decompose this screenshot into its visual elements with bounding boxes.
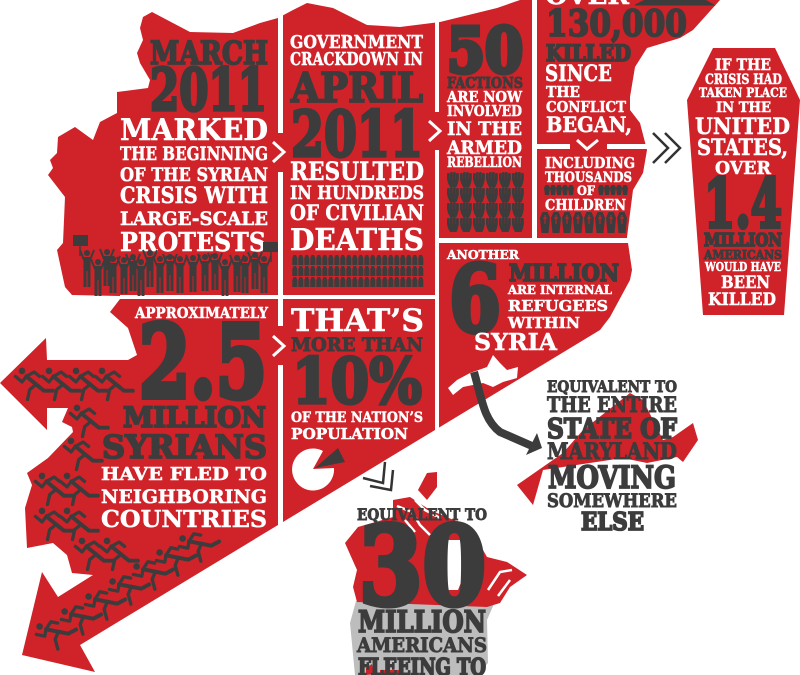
panel: 2.5 million refugees: NEIGHBORING bbox=[101, 486, 267, 508]
panel: March 2011: THE BEGINNING bbox=[120, 143, 268, 165]
map: Maryland with comparison text: EQUIVALENT TO bbox=[547, 377, 677, 396]
panel: including thousands of children: CHILDREN bbox=[545, 196, 626, 214]
map: Maryland with comparison text: MOVING bbox=[548, 460, 676, 496]
panel: April 2011: CRACKDOWN IN bbox=[290, 49, 423, 70]
panel: including thousands of children: INCLUDING bbox=[545, 154, 635, 172]
map: Maryland with comparison text: SOMEWHERE bbox=[547, 490, 677, 512]
map: Maryland with comparison text bbox=[517, 377, 698, 536]
panel dividers bbox=[120, 0, 649, 527]
panel: 2.5 million refugees: MILLION bbox=[123, 401, 266, 434]
panel: March 2011: 2011 bbox=[150, 56, 267, 124]
map: Canada and United States with comparison text bbox=[345, 472, 527, 675]
panel: April 2011 bbox=[290, 32, 424, 258]
panel: over 130,000 killed: THE bbox=[546, 83, 580, 101]
arrow: double chevron to coffin bbox=[653, 133, 680, 163]
white cut-out of Maryland region bbox=[448, 355, 518, 395]
icon: rows of small coffins bbox=[292, 255, 424, 288]
icon: fleeing runners bbox=[15, 368, 223, 655]
panel: including thousands of children bbox=[540, 154, 635, 233]
panel: April 2011: RESULTED bbox=[290, 157, 424, 186]
panel: 6 million internal refugees: ARE INTERNAL bbox=[507, 283, 613, 297]
panel: over 130,000 killed: KILLED bbox=[546, 41, 631, 67]
panel: March 2011: MARCH bbox=[150, 34, 268, 72]
panel: 50 factions: ARE NOW bbox=[446, 88, 523, 106]
panel: coffin United States comparison: KILLED bbox=[708, 290, 776, 310]
panel: 6 million internal refugees: SYRIA bbox=[474, 329, 558, 356]
panel: more than 10%: MORE THAN bbox=[291, 334, 423, 356]
panel: 50 factions: IN THE bbox=[447, 118, 522, 140]
panel: coffin United States comparison: IN THE bbox=[716, 100, 771, 116]
map: Canada and United States with comparison text: 30 bbox=[359, 504, 486, 630]
panel: coffin United States comparison: WOULD HAVE bbox=[704, 260, 781, 274]
panel: March 2011: LARGE-SCALE bbox=[120, 208, 268, 230]
panel: 6 million internal refugees: 6 bbox=[449, 245, 501, 353]
panel: coffin United States comparison: STATES, bbox=[697, 135, 788, 161]
panel: more than 10%: OF THE NATION’S bbox=[291, 410, 423, 426]
panel: 2.5 million refugees: HAVE FLED TO bbox=[101, 464, 267, 485]
panel: April 2011: IN HUNDREDS bbox=[290, 182, 424, 204]
panel: April 2011: 2011 bbox=[291, 97, 423, 171]
panel: March 2011: OF THE SYRIAN bbox=[120, 164, 268, 186]
panel: March 2011: CRISIS WITH bbox=[120, 183, 268, 209]
panel: 6 million internal refugees: WITHIN bbox=[507, 314, 580, 332]
panel: 50 factions: ARMED bbox=[446, 137, 522, 159]
panel: coffin United States comparison: IF THE bbox=[715, 55, 771, 74]
panel: 2.5 million refugees: APPROXIMATELY bbox=[134, 304, 268, 322]
panel: more than 10%: 10% bbox=[292, 344, 422, 418]
chevrons between panels bbox=[273, 121, 598, 356]
arrow: curved arrow to Maryland bbox=[474, 372, 542, 455]
panel: March 2011: MARKED bbox=[120, 113, 268, 148]
panel: 50 factions: INVOLVED bbox=[447, 102, 522, 120]
panel: 2.5 million refugees: SYRIANS bbox=[102, 428, 267, 466]
panel: 6 million internal refugees: REFUGEES bbox=[508, 297, 608, 315]
icon: protest crowd with signs bbox=[73, 235, 278, 296]
map: Maryland with comparison text: THE ENTIRE bbox=[547, 392, 677, 417]
map: Maryland with comparison text: ELSE bbox=[581, 507, 644, 536]
map: Maryland with comparison text: STATE OF bbox=[547, 414, 677, 445]
icon: pie chart 10 percent bbox=[292, 448, 345, 490]
map: Maryland with comparison text: MARYLAND bbox=[547, 439, 677, 465]
panel: 2.5 million refugees: COUNTRIES bbox=[101, 506, 267, 533]
panel: 50 factions: 50 bbox=[447, 14, 523, 87]
panel: 6 million internal refugees bbox=[446, 245, 619, 356]
panel: April 2011: GOVERNMENT bbox=[290, 32, 424, 53]
panel: over 130,000 killed: BEGAN, bbox=[546, 112, 632, 137]
panel: including thousands of children: THOUSANDS bbox=[545, 170, 632, 186]
panel: 50 factions: REBELLION bbox=[447, 155, 522, 171]
panel: 50 factions: FACTIONS bbox=[447, 74, 523, 92]
panel: coffin United States comparison: CRISIS HAD bbox=[705, 72, 782, 88]
panel: March 2011 bbox=[120, 34, 268, 258]
panel: more than 10%: THAT’S bbox=[291, 303, 424, 339]
panel: over 130,000 killed bbox=[545, 0, 714, 137]
panel: coffin United States comparison: OVER bbox=[715, 158, 772, 179]
panel: 2.5 million refugees: 2.5 bbox=[139, 303, 267, 421]
map: Canada and United States with comparison text: EQUIVALENT TO bbox=[357, 505, 487, 524]
panel: coffin United States comparison: MILLION bbox=[704, 230, 782, 251]
panel: over 130,000 killed: SINCE bbox=[545, 61, 612, 87]
panel: 6 million internal refugees: ANOTHER bbox=[446, 248, 520, 262]
map: Canada and United States with comparison text: AMERICANS bbox=[356, 633, 487, 657]
panel: coffin United States comparison: AMERICANS bbox=[703, 248, 782, 262]
panel: March 2011: PROTESTS bbox=[120, 228, 266, 258]
panel: coffin United States comparison: UNITED bbox=[695, 114, 790, 140]
map: Canada and United States with comparison text: MILLION bbox=[358, 605, 486, 640]
panel: coffin United States comparison: BEEN bbox=[721, 273, 770, 293]
panel: April 2011: DEATHS bbox=[290, 223, 424, 258]
panel: 6 million internal refugees: MILLION bbox=[509, 260, 619, 287]
arrow: double chevron to Canada bbox=[363, 462, 393, 490]
panel: coffin United States comparison bbox=[687, 48, 800, 315]
panel: over 130,000 killed: CONFLICT bbox=[546, 98, 627, 116]
panel: April 2011: OF CIVILIAN bbox=[290, 200, 424, 225]
panel: April 2011: APRIL bbox=[290, 64, 423, 112]
icon: grid of raised fists bbox=[447, 172, 524, 232]
panel: including thousands of children: OF bbox=[577, 184, 596, 199]
panel: over 130,000 killed: 130,000 bbox=[546, 3, 687, 45]
panel: 2.5 million refugees bbox=[101, 303, 268, 533]
panel: more than 10%: POPULATION bbox=[291, 425, 408, 443]
panel: more than 10% bbox=[291, 303, 424, 443]
panel: 50 factions bbox=[446, 14, 523, 171]
